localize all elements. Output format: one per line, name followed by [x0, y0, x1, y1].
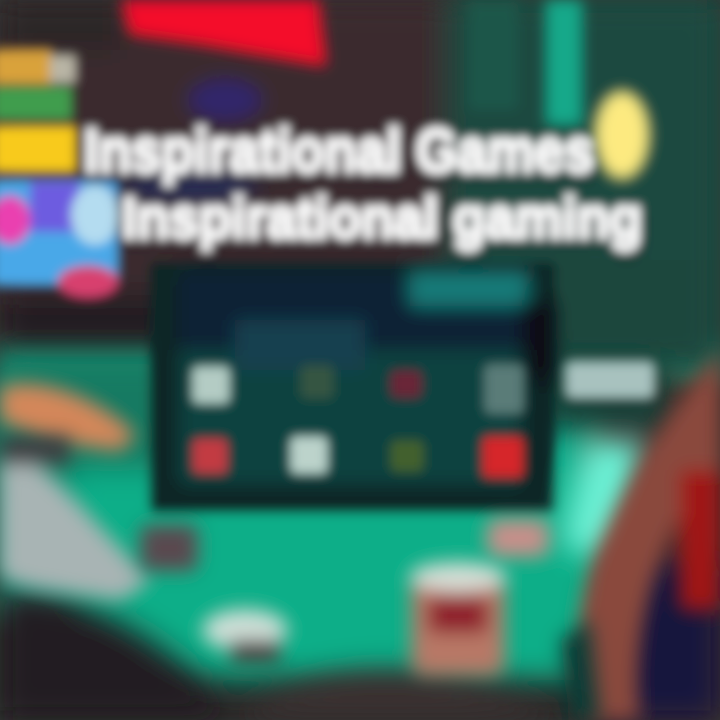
icon: gray tile top right [484, 364, 524, 414]
person: left sleeve and body [0, 435, 560, 720]
background: green table [0, 355, 670, 680]
yellow lamp [595, 91, 649, 179]
heading shadow: Inspirational gaming [124, 192, 644, 257]
teal vertical light stripe [468, 0, 582, 125]
side light panel [566, 362, 654, 398]
icon: dark red tile top [390, 370, 422, 398]
heading line 1: Inspirational Games [84, 117, 594, 186]
heading line 2: Inspirational gaming [122, 186, 642, 251]
icon: red tile bottom left [192, 438, 228, 474]
heading [84, 117, 642, 251]
small purple glow [120, 78, 263, 203]
red cup [410, 563, 506, 675]
monitor frame [150, 262, 555, 512]
icon: red tile bottom right [482, 436, 524, 478]
person: left hand [0, 385, 135, 450]
icon: olive tile bottom [390, 440, 424, 472]
icon: light tile top left [192, 366, 230, 404]
heading shadow: Inspirational Games [86, 123, 596, 192]
cards and cups on table [140, 520, 548, 662]
icon: olive tile top [300, 365, 334, 399]
neon red sign [122, 0, 326, 66]
background: upper room [0, 0, 720, 370]
monitor screen [178, 270, 554, 485]
light reflection on table [560, 440, 645, 565]
screen icons [192, 364, 524, 478]
icon: light tile bottom [290, 436, 328, 474]
heading shadow [86, 123, 644, 257]
left colour stack [0, 50, 119, 298]
person: right arm [560, 350, 720, 720]
panel: central monitor [150, 262, 555, 512]
